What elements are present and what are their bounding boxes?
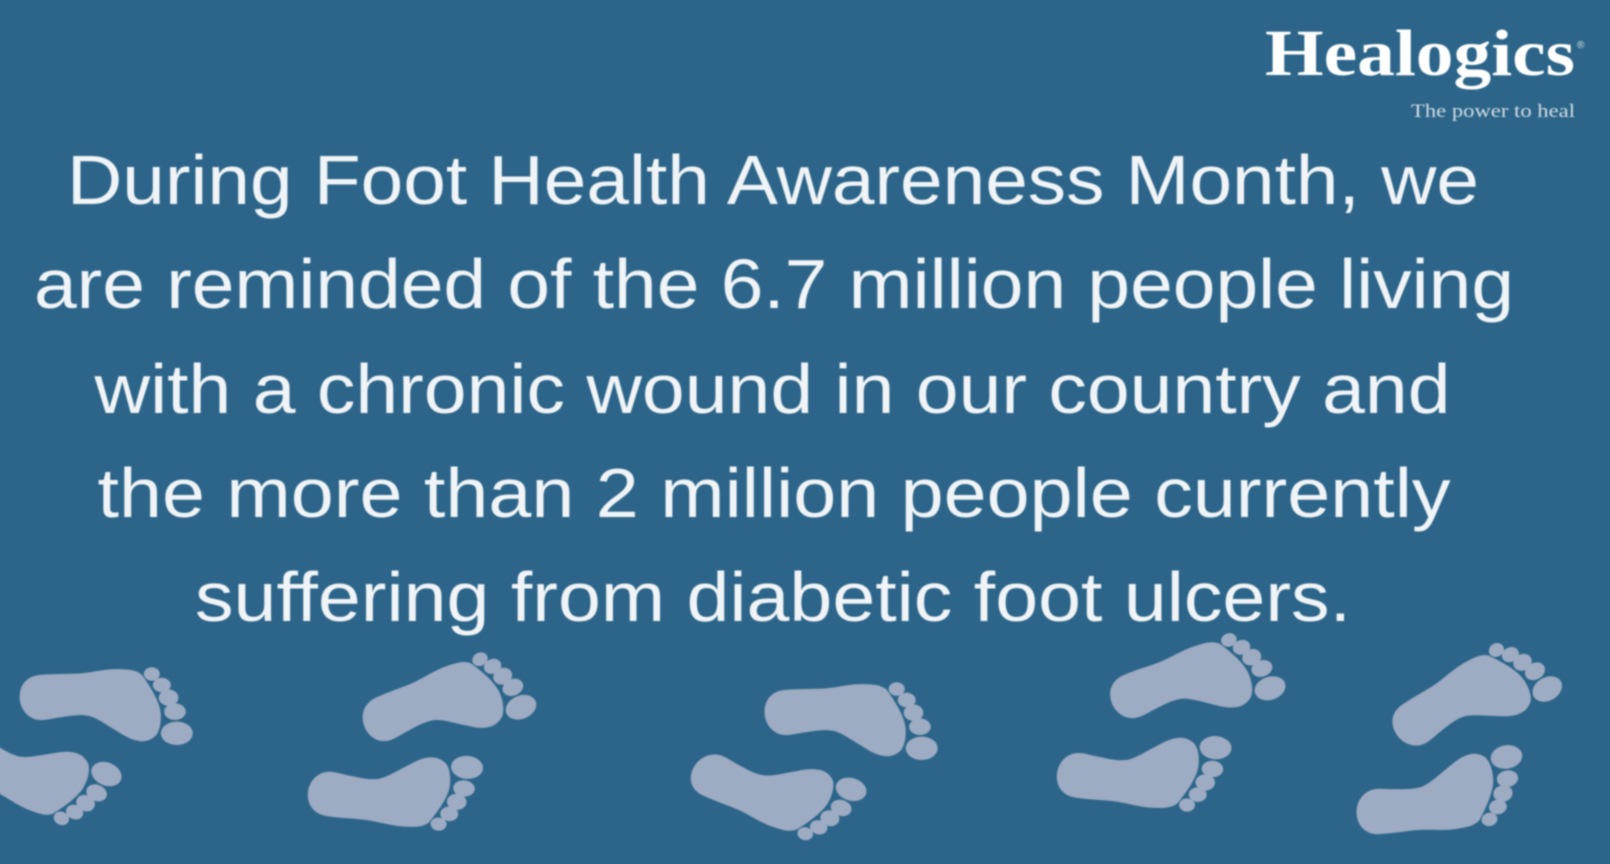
message line 5: suffering from diabetic foot ulcers. xyxy=(195,558,1351,636)
icon: footprint 3 upper xyxy=(764,682,938,760)
main message xyxy=(34,141,1514,636)
icon: footprint 3 lower xyxy=(681,726,870,853)
message line 4: the more than 2 million people currently xyxy=(98,454,1450,532)
footprints row xyxy=(0,621,1567,853)
message line 1: During Foot Health Awareness Month, we xyxy=(67,141,1479,219)
icon: footprint 5 upper xyxy=(1381,624,1567,775)
logo wordmark: Healogics xyxy=(1265,17,1575,90)
icon: footprint 1 upper xyxy=(20,667,193,745)
icon: footprint 4 lower xyxy=(1055,727,1232,814)
icon: footprint 2 upper xyxy=(355,639,539,771)
icon: footprint 1 lower xyxy=(0,704,125,840)
logo tagline: The power to heal xyxy=(1411,101,1575,122)
message line 2: are reminded of the 6.7 million people living xyxy=(34,245,1514,323)
logo: Healogics xyxy=(1265,17,1585,122)
message line 3: with a chronic wound in our country and xyxy=(93,350,1451,428)
icon: footprint 4 upper xyxy=(1103,621,1289,747)
icon: footprint 5 lower xyxy=(1351,743,1531,845)
registered mark: ® xyxy=(1577,40,1585,51)
icon: footprint 2 lower xyxy=(306,746,484,833)
